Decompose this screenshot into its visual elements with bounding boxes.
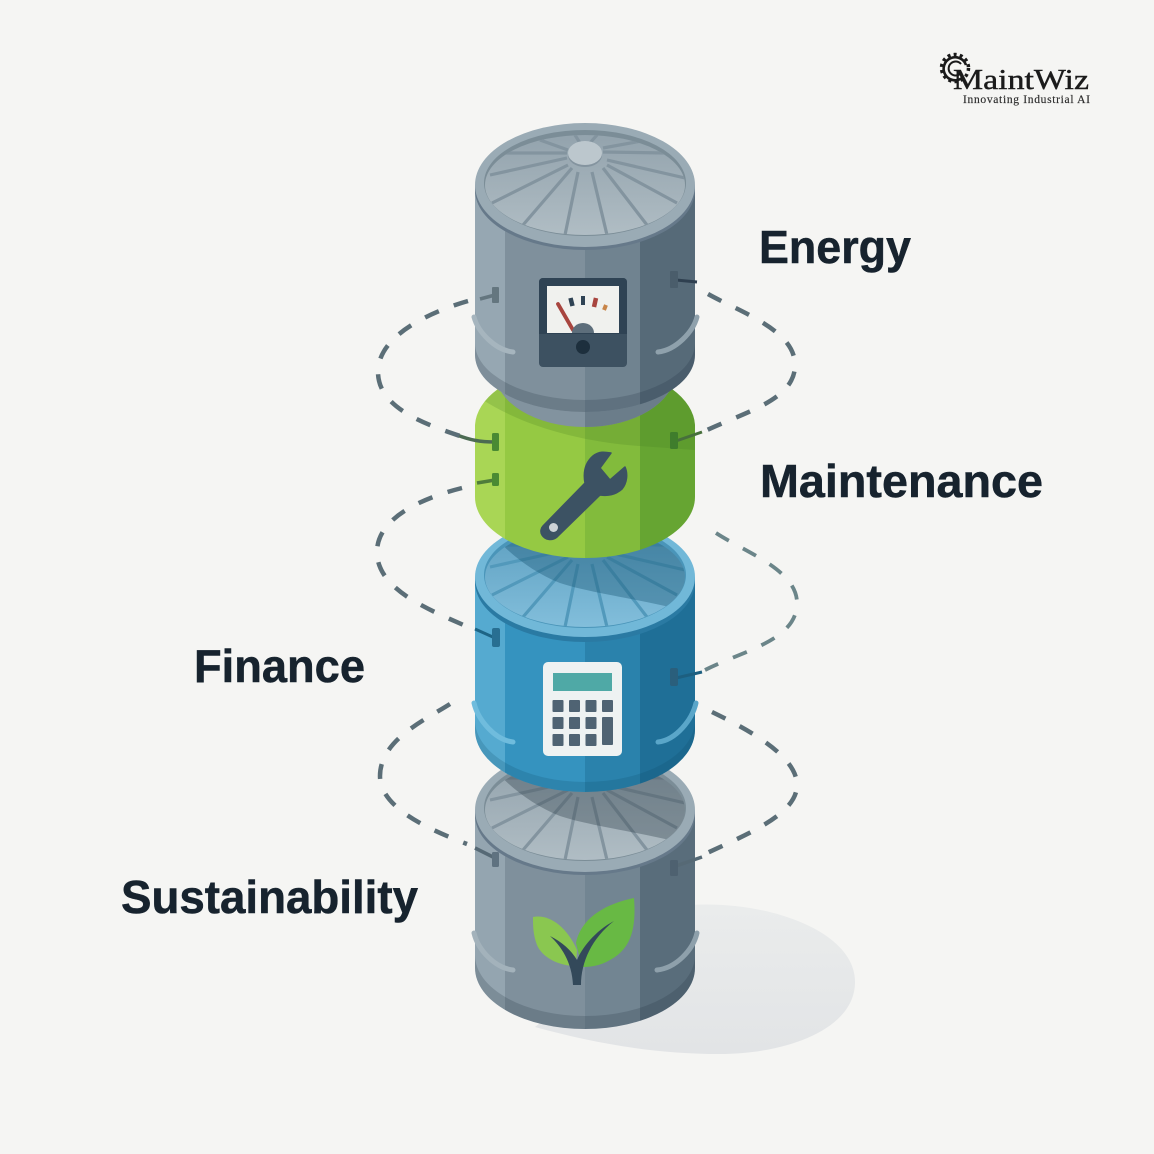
lid: energy drum: [475, 123, 695, 250]
label: Energy: Energy: [759, 221, 911, 273]
panel: finance drum: [472, 537, 702, 792]
connector: maintenance right: [670, 432, 702, 449]
icon: gear swirl: [942, 54, 968, 82]
panel: sustainability drum: [472, 770, 702, 1029]
label: Sustainability: Sustainability: [121, 871, 418, 923]
connector: sustainability right: [670, 857, 702, 876]
logo: MaintWiz: [942, 54, 1090, 106]
connector: maintenance left upper: [457, 433, 499, 451]
icon: wrench: [541, 452, 627, 539]
dashed loop: finance right: [705, 712, 797, 854]
icon: leaf sprout: [533, 898, 635, 985]
drum ground shadow: [535, 904, 855, 1054]
connector: finance right: [670, 668, 702, 686]
dashed loop: finance left: [380, 704, 467, 844]
panel: energy drum: [474, 123, 697, 427]
drum underside lip: [495, 317, 675, 427]
logo wordmark: MaintWiz: [953, 65, 1089, 96]
dashed loop: maintenance right: [705, 533, 797, 670]
logo tagline: Innovating Industrial AI: [963, 94, 1090, 106]
dashed loop: energy right: [705, 294, 795, 431]
icon: analog gauge: [539, 278, 627, 367]
label: Maintenance: Maintenance: [760, 455, 1043, 507]
dashed loop: maintenance left: [377, 488, 468, 627]
connector: finance left: [475, 628, 500, 647]
connector: energy right: [670, 271, 697, 288]
connector: sustainability left: [475, 848, 499, 867]
panel: maintenance drum: [458, 390, 702, 558]
lid: finance drum: [475, 537, 695, 642]
connector: energy left: [480, 287, 499, 303]
lid: sustainability drum: [475, 770, 695, 875]
icon: calculator: [543, 662, 622, 756]
label: Finance: Finance: [194, 640, 365, 692]
connector: maintenance left lower: [477, 473, 499, 486]
dashed loop: energy left: [378, 301, 468, 436]
